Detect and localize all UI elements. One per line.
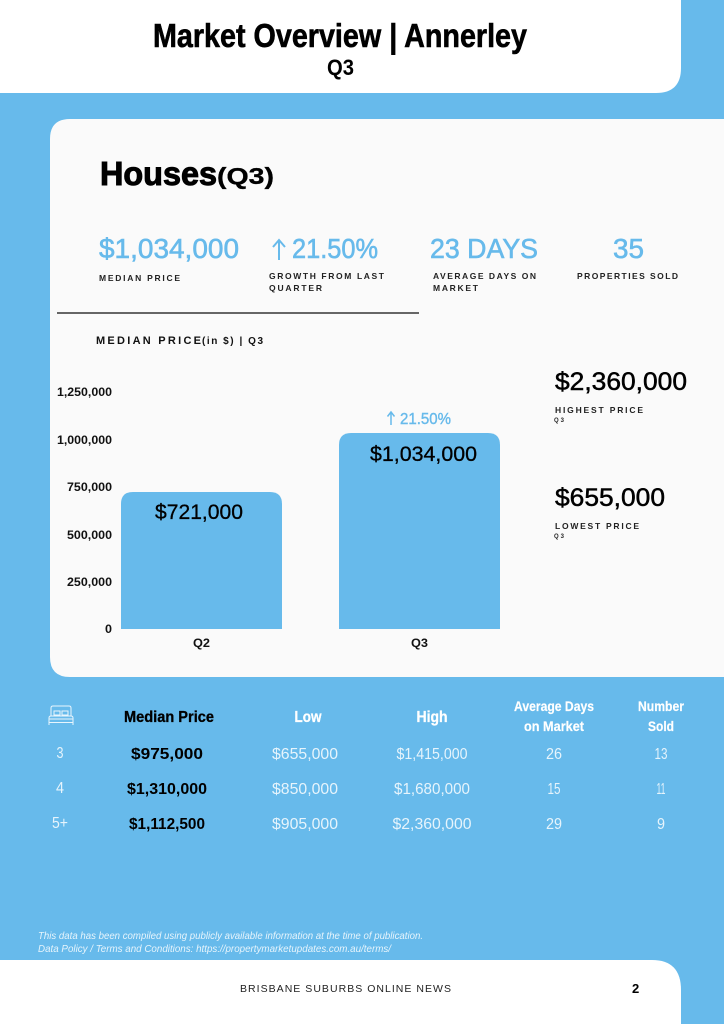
bar: Q3: Q3: [411, 636, 428, 650]
stat: properties sold: [577, 233, 678, 281]
disclaimer text: [38, 930, 423, 955]
heading: houses: (Q3): [217, 163, 274, 189]
stat: lowest price: Q3: [554, 534, 565, 540]
bar: Q2: [121, 492, 282, 650]
row: 4 bedrooms: 11: [656, 781, 666, 798]
row: 3 bedrooms: $655,000: [272, 746, 338, 763]
bar: Q2: $721,000: [155, 501, 243, 524]
y axis labels: 1,250,000: [57, 385, 112, 399]
y axis labels: 750,000: [67, 480, 112, 494]
disclaimer text: This data has been compiled using publicly available information at the time of publication.: [38, 930, 423, 942]
stat: lowest price: $655,000: [555, 484, 665, 512]
table header: Low: [294, 709, 322, 726]
y axis labels: [57, 385, 112, 636]
bar: Q3: $1,034,000: [370, 443, 477, 466]
stat: highest price: Q3: [554, 418, 565, 424]
stat: properties sold: PROPERTIES SOLD: [577, 271, 678, 281]
row: 3 bedrooms: 3: [56, 745, 64, 762]
row: 4 bedrooms: 4: [56, 780, 64, 797]
footer panel: [0, 960, 681, 1024]
table header: on Market: [524, 718, 584, 734]
stat: days on market: AVERAGE DAYS ON: [433, 271, 536, 281]
y axis labels: 1,000,000: [57, 433, 112, 447]
bar: Q3: [339, 433, 500, 650]
stat: days on market: 23 DAYS: [430, 233, 538, 264]
heading: houses: [100, 155, 274, 192]
title: Market Overview | Annerley: [153, 17, 528, 54]
row: 3 bedrooms: 13: [654, 746, 668, 763]
table header: Sold: [648, 718, 674, 734]
subtitle: Q3: [327, 55, 354, 80]
header panel: [0, 0, 681, 93]
row: 4 bedrooms: $850,000: [272, 781, 338, 798]
stat: median price: $1,034,000: [99, 233, 239, 264]
icon: bed: [49, 706, 73, 725]
stat: lowest price: [554, 484, 665, 540]
growth callout: 21.50%: [400, 411, 451, 428]
disclaimer text: Data Policy / Terms and Conditions: https://propertymarketupdates.com.au/terms/: [38, 943, 392, 955]
main panel: houses: [50, 119, 724, 677]
row: 4 bedrooms: $1,310,000: [127, 781, 207, 798]
y axis labels: 250,000: [67, 575, 112, 589]
table header: Number: [638, 698, 684, 714]
table header: Average Days: [514, 698, 594, 714]
stat: median price: MEDIAN PRICE: [99, 273, 180, 283]
stat: growth: 21.50%: [292, 233, 378, 264]
heading: houses: Houses: [100, 155, 217, 192]
table header: Median Price: [124, 709, 214, 726]
chart heading: [96, 335, 263, 347]
stat: highest price: HIGHEST PRICE: [555, 405, 643, 415]
chart heading: (in $) | Q3: [202, 336, 263, 347]
row: 5+ bedrooms: [52, 815, 665, 833]
row: 5+ bedrooms: 9: [657, 816, 665, 833]
stat: highest price: $2,360,000: [555, 368, 687, 396]
bar: Q2: Q2: [193, 636, 210, 650]
stat: growth: QUARTER: [269, 283, 322, 293]
stat: growth: [269, 233, 385, 293]
table: prices by bedrooms: [49, 698, 684, 833]
row: 5+ bedrooms: 5+: [52, 815, 68, 832]
bar chart: [57, 385, 500, 650]
stat: highest price: [554, 368, 687, 424]
y axis labels: 500,000: [67, 528, 112, 542]
stat: growth: GROWTH FROM LAST: [269, 271, 385, 281]
table header: High: [416, 709, 448, 726]
row: 4 bedrooms: $1,680,000: [394, 781, 470, 798]
stat: days on market: [430, 233, 538, 293]
row: 5+ bedrooms: $1,112,500: [129, 816, 205, 833]
stat: properties sold: 35: [613, 233, 644, 264]
table header: [124, 698, 684, 734]
icon: up arrow: [273, 240, 285, 260]
row: 5+ bedrooms: $2,360,000: [392, 816, 472, 833]
row: 4 bedrooms: 15: [548, 781, 561, 798]
row: 5+ bedrooms: 29: [546, 816, 562, 833]
row: 5+ bedrooms: $905,000: [272, 816, 338, 833]
stat: lowest price: LOWEST PRICE: [555, 521, 639, 531]
row: 4 bedrooms: [56, 780, 666, 798]
footer publication name: BRISBANE SUBURBS ONLINE NEWS: [240, 983, 451, 995]
page number: 2: [632, 981, 639, 996]
row: 3 bedrooms: $1,415,000: [396, 746, 468, 763]
row: 3 bedrooms: 26: [546, 746, 562, 763]
row: 3 bedrooms: [56, 745, 668, 763]
row: 3 bedrooms: $975,000: [131, 746, 203, 763]
stat: days on market: MARKET: [433, 283, 479, 293]
y axis labels: 0: [105, 622, 112, 636]
chart heading: MEDIAN PRICE: [96, 335, 201, 347]
stat: median price: [99, 233, 239, 283]
